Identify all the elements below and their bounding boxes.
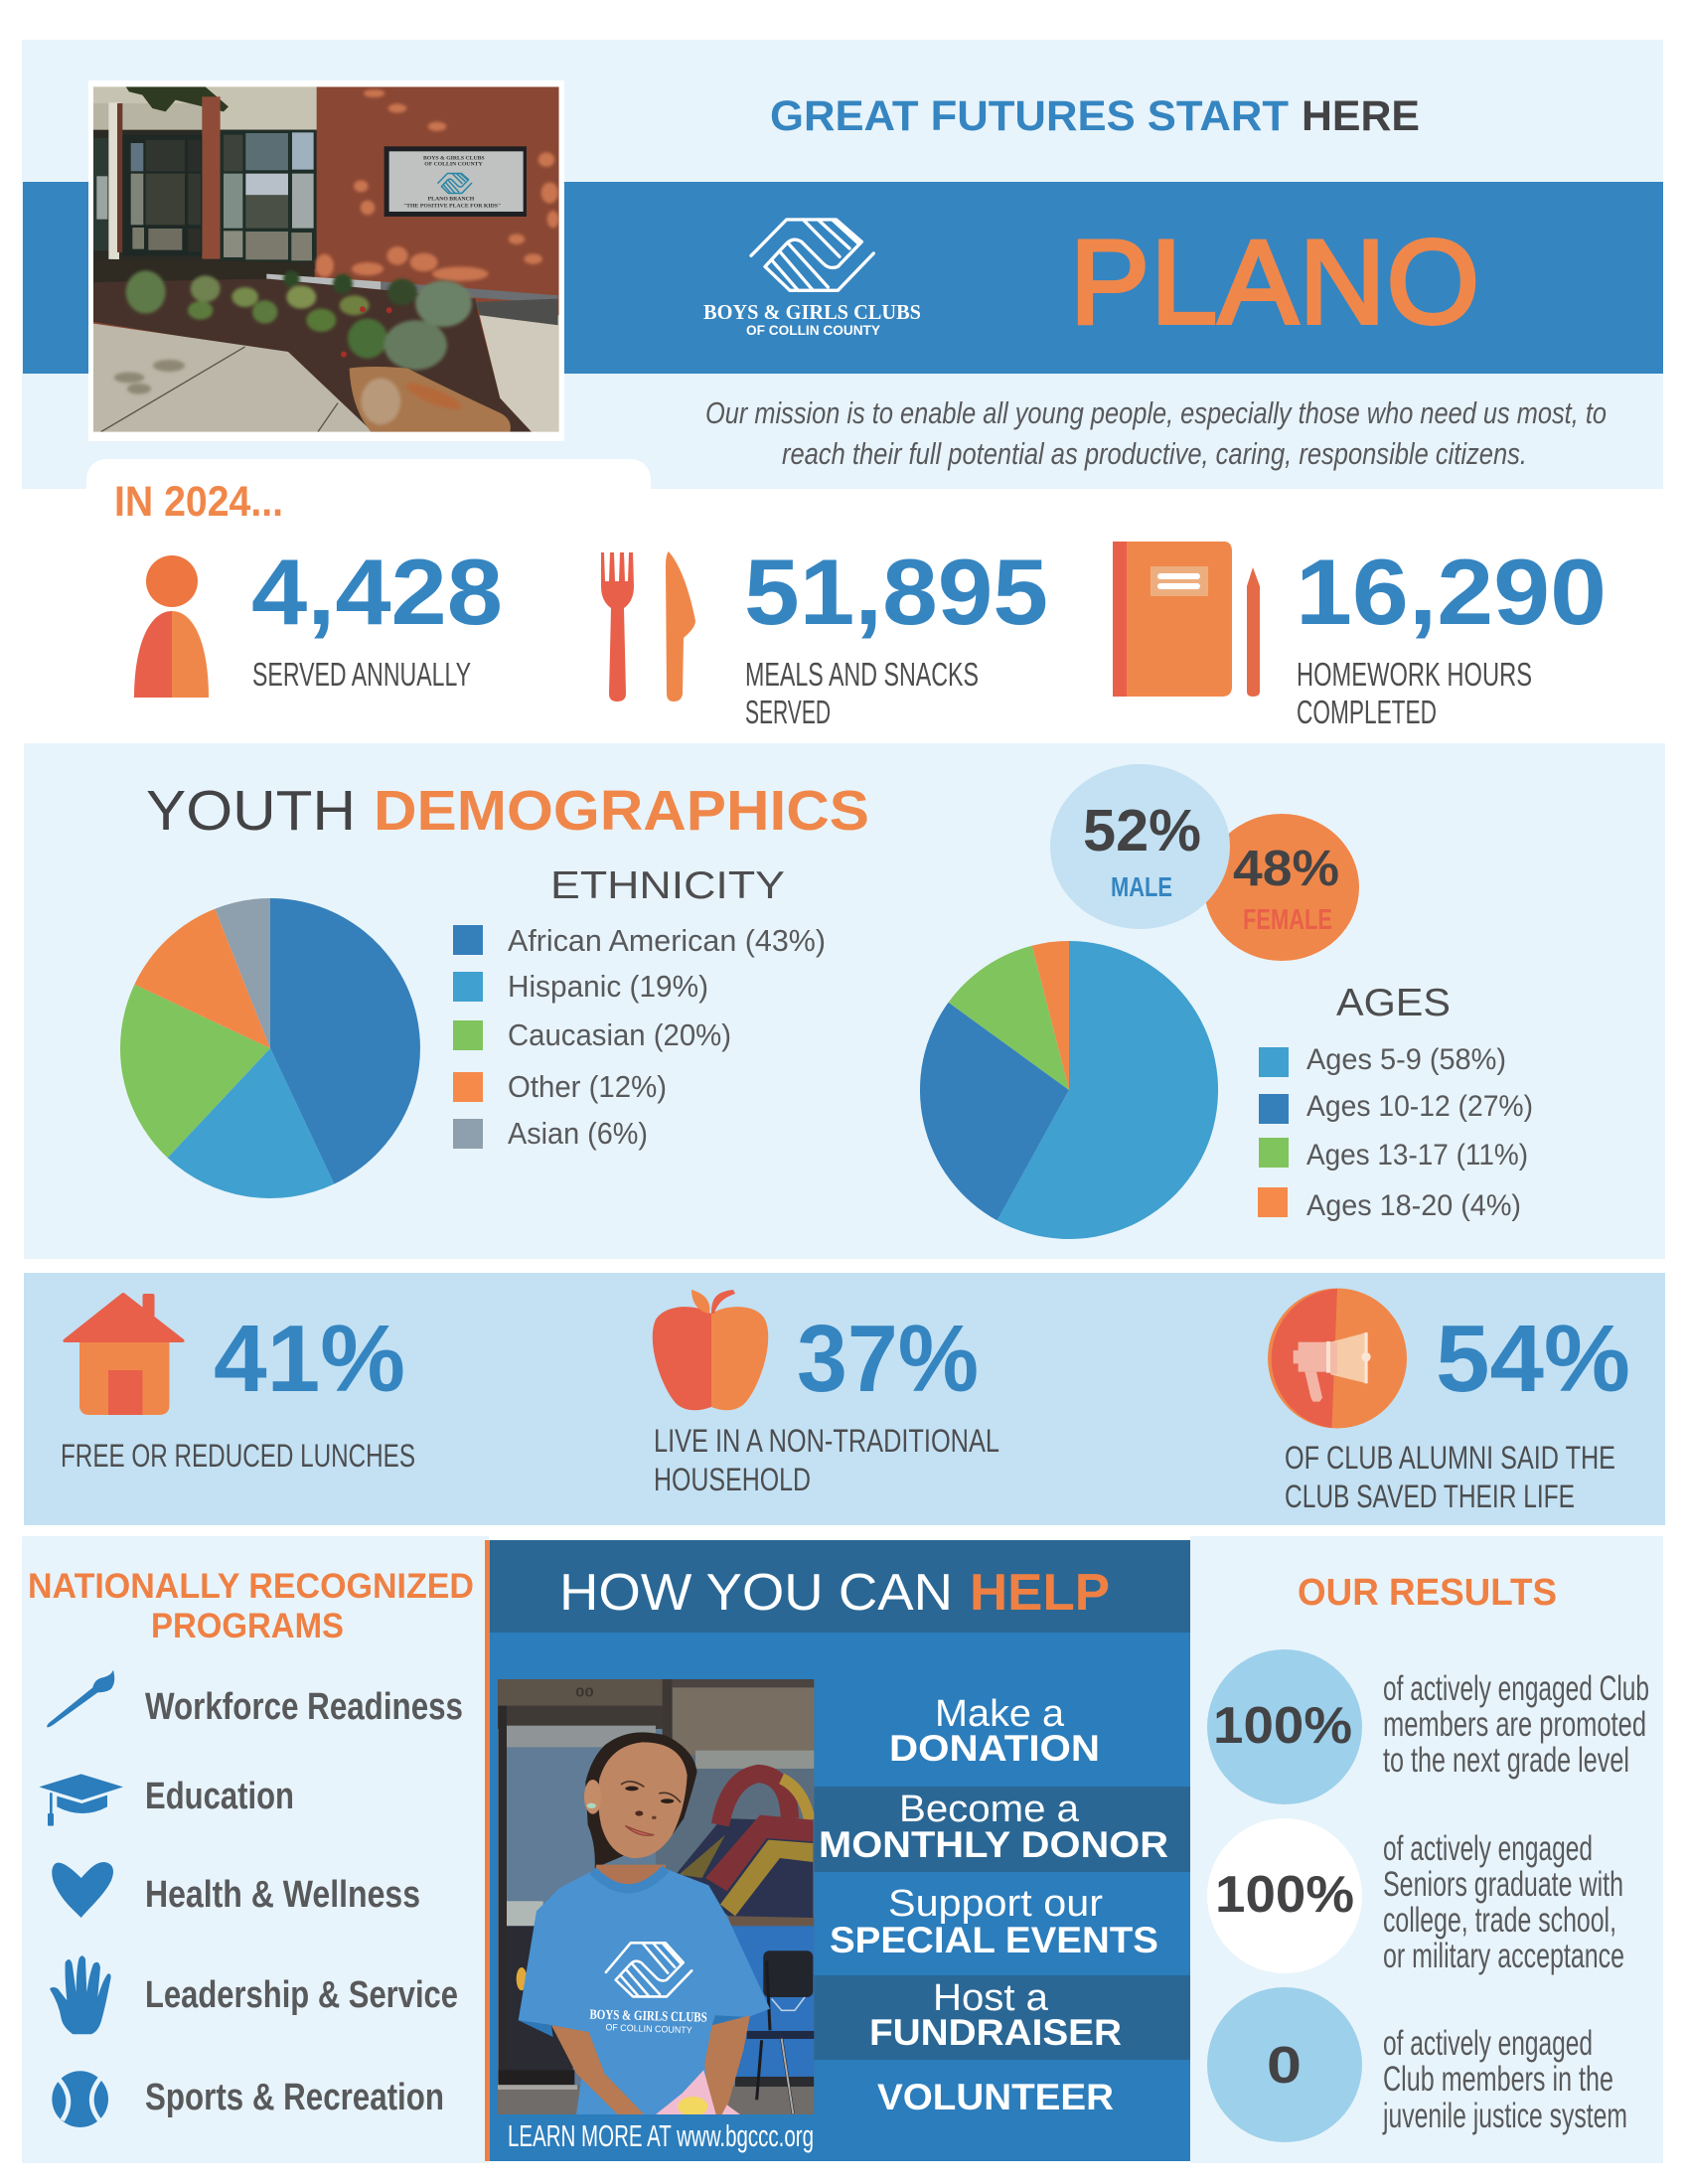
legend: ethnicity: African American (43%) [508, 923, 826, 958]
mission statement: reach their full potential as productive, caring, responsible citizens. [782, 436, 1527, 471]
caption: SERVED [745, 694, 831, 730]
icon: person [134, 555, 209, 698]
photo: child in club shirt [498, 1679, 815, 2116]
caption: household: HOUSEHOLD [654, 1462, 811, 1497]
result: promoted [1207, 1649, 1649, 1804]
panel: header [22, 40, 1663, 489]
tagline: GREAT FUTURES START [770, 92, 1289, 140]
action: monthly donor [819, 1789, 1168, 1865]
heading: programs: NATIONALLY RECOGNIZED [28, 1567, 474, 1606]
legend: ethnicity: Asian (6%) [508, 1116, 648, 1151]
legend: ethnicity [453, 923, 826, 1151]
logo: Boys & Girls Clubs: BOYS & GIRLS CLUBS [703, 300, 921, 324]
action: make a donation: DONATION [889, 1728, 1100, 1769]
caption [1297, 656, 1532, 730]
heading: youth demographics [146, 779, 869, 843]
legend: ages: Ages 5-9 (58%) [1306, 1043, 1506, 1076]
tagline: HERE [1302, 92, 1420, 140]
action: monthly donor: MONTHLY DONOR [819, 1824, 1168, 1865]
action: make a donation [889, 1693, 1100, 1769]
logo: Boys & Girls Clubs: OF COLLIN COUNTY [746, 322, 881, 338]
action: monthly donor: Become a [899, 1789, 1080, 1830]
label: sports and recreation: Sports & Recreation [145, 2077, 444, 2118]
child: OF COLLIN COUNTY [605, 2022, 693, 2035]
shirt logo [606, 1943, 691, 1996]
result: graduate: 100% [1215, 1866, 1354, 1924]
logo: Boys & Girls Clubs [703, 220, 921, 338]
icon: graduation cap [39, 1774, 123, 1826]
caption: household [654, 1423, 999, 1497]
icon: house [63, 1293, 185, 1415]
icon: notebook and pencil [1113, 542, 1260, 697]
panel: key percentages [24, 1273, 1665, 1525]
legend: ages [1258, 1043, 1533, 1222]
photo: child in club shirt: 00 [575, 1684, 594, 1699]
heading: ethnicity: ETHNICITY [550, 864, 785, 907]
legend: ages: Ages 13-17 (11%) [1306, 1139, 1528, 1171]
icon: apple [653, 1290, 768, 1410]
heading: in 2024: IN 2024... [114, 478, 283, 526]
header blue band [23, 182, 1663, 374]
caption: household: LIVE IN A NON-TRADITIONAL [654, 1423, 999, 1459]
heading: programs [28, 1567, 474, 1645]
action: host a fundraiser [869, 1977, 1122, 2053]
heading: programs: PROGRAMS [151, 1607, 344, 1645]
number: 4,428 [251, 540, 503, 644]
pie chart: ethnicity [120, 898, 420, 1198]
heading: our results: OUR RESULTS [1298, 1572, 1557, 1614]
action: make a donation: Make a [935, 1693, 1065, 1735]
legend: ethnicity: Hispanic (19%) [508, 969, 708, 1004]
icon: ball [52, 2071, 108, 2127]
heading: youth demographics: YOUTH [146, 779, 356, 843]
stat: homework hours [1113, 540, 1607, 730]
result: juvenile justice: 0 [1267, 2037, 1302, 2095]
stat: 37 percent: 37% [797, 1306, 979, 1412]
label: workforce readiness: Workforce Readiness [145, 1686, 463, 1728]
legend: ages: Ages 18-20 (4%) [1306, 1189, 1521, 1222]
stat: meals and snacks [601, 540, 1048, 730]
link: learn more: LEARN MORE AT www.bgccc.org [508, 2118, 814, 2153]
callout: female: 48% [1233, 840, 1339, 896]
heading: ages: AGES [1336, 982, 1451, 1024]
result: graduate: of actively engaged [1383, 1829, 1593, 1868]
caption: lunches: FREE OR REDUCED LUNCHES [61, 1438, 415, 1474]
label: education: Education [145, 1776, 294, 1817]
action: volunteer: VOLUNTEER [877, 2077, 1114, 2117]
callout: female [1204, 814, 1359, 961]
panel: our results [1190, 1536, 1663, 2163]
stat: served annually [134, 540, 503, 698]
legend: ethnicity: Other (12%) [508, 1069, 667, 1104]
sign on building [384, 146, 527, 217]
caption: alumni: CLUB SAVED THEIR LIFE [1285, 1479, 1575, 1514]
legend: ages: Ages 10-12 (27%) [1306, 1090, 1533, 1123]
heading: how you can help: HOW YOU CAN [559, 1564, 953, 1622]
sign on building: BOYS & GIRLS CLUBS [423, 156, 485, 162]
action: special events [830, 1883, 1158, 1960]
caption: MEALS AND SNACKS [745, 656, 979, 693]
mission statement [705, 395, 1607, 471]
panel: youth demographics [24, 743, 1665, 1259]
child [519, 1732, 770, 2116]
callout: male: 52% [1083, 798, 1201, 863]
icon: hand [50, 1955, 111, 2034]
panel: how you can help [485, 1540, 1190, 2161]
sign on building: OF COLLIN COUNTY [424, 162, 483, 167]
label: leadership and service: Leadership & Service [145, 1974, 458, 2016]
icon: megaphone [1268, 1288, 1407, 1429]
panel: in 2024 tab [86, 459, 651, 526]
label: health and wellness: Health & Wellness [145, 1874, 420, 1916]
heading: youth demographics: DEMOGRAPHICS [374, 779, 869, 843]
result: graduate [1207, 1818, 1624, 1975]
caption: SERVED ANNUALLY [252, 656, 471, 693]
number: 16,290 [1296, 540, 1607, 644]
icon: paint brush [47, 1670, 114, 1727]
stat: 41 percent: 41% [214, 1306, 405, 1412]
pie chart: ages [920, 941, 1218, 1239]
action: host a fundraiser: FUNDRAISER [869, 2012, 1122, 2053]
result: promoted: 100% [1213, 1697, 1352, 1755]
action: special events: SPECIAL EVENTS [830, 1920, 1158, 1960]
heading: how you can help: HELP [970, 1564, 1110, 1622]
photo: Plano club building [88, 80, 564, 441]
number: 51,895 [744, 540, 1048, 644]
heading: how you can help [559, 1564, 1110, 1622]
sign on building: "THE POSITIVE PLACE FOR KIDS" [403, 204, 502, 209]
heading: PLANO: PLANO [1070, 216, 1479, 349]
caption [745, 656, 979, 730]
caption: COMPLETED [1297, 694, 1437, 730]
action: special events: Support our [888, 1883, 1103, 1925]
action: host a fundraiser: Host a [933, 1977, 1049, 2019]
callout: female: FEMALE [1243, 904, 1332, 936]
result: juvenile justice: of actively engaged [1383, 2024, 1593, 2063]
caption: HOMEWORK HOURS [1297, 656, 1532, 693]
icon: fork and knife [601, 551, 695, 702]
icon: heart [52, 1862, 113, 1918]
callout: male: MALE [1111, 871, 1172, 902]
child: BOYS & GIRLS CLUBS [589, 2008, 707, 2026]
stat: 54 percent: 54% [1436, 1306, 1630, 1412]
caption: alumni [1285, 1440, 1615, 1514]
sign on building: PLANO BRANCH [428, 197, 474, 202]
legend: ethnicity: Caucasian (20%) [508, 1017, 731, 1052]
panel: nationally recognized programs [22, 1536, 489, 2163]
callout: male [1050, 764, 1230, 929]
result: juvenile justice [1207, 1987, 1627, 2142]
